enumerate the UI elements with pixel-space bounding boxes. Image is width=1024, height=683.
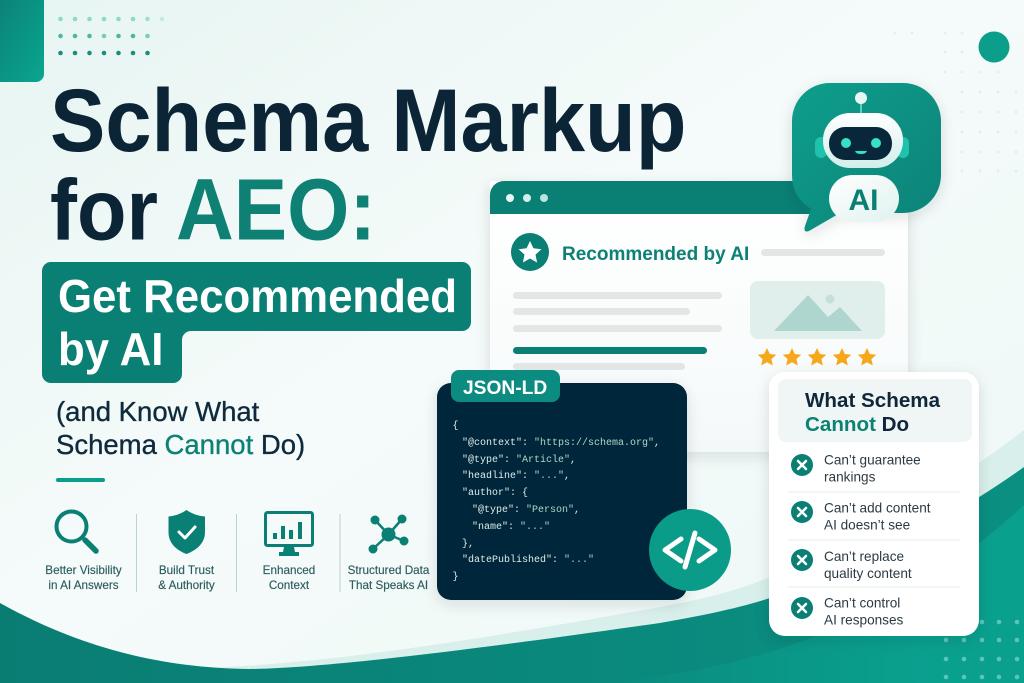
subtitle badge: by AI: [58, 323, 163, 375]
code: "author": {: [462, 487, 528, 499]
icon: shield: [168, 510, 205, 554]
accent underline: [56, 478, 105, 482]
corner square: [0, 0, 44, 82]
title: AEO:: [176, 160, 376, 258]
panel: what schema cannot do: [769, 372, 979, 636]
code: "...": [558, 554, 594, 566]
code: "...",: [534, 471, 570, 482]
code: "@type":: [472, 504, 520, 516]
list item: rankings: Can’t guarantee: [824, 452, 921, 468]
icon: magnifier: [56, 512, 96, 551]
teal circle top right: [978, 32, 1010, 62]
code: "headline":: [462, 470, 528, 482]
icon: AI robot bubble: [792, 83, 941, 231]
dots bottom right: [944, 620, 1019, 679]
code: "Article",: [516, 455, 576, 466]
panel: browser window: [490, 181, 908, 452]
list item: content: Can’t add content: [824, 500, 931, 516]
robot body: AI: [848, 184, 878, 217]
secondary heading: (and Know What: [56, 396, 260, 427]
window dots: [506, 194, 548, 202]
list item: quality: Can’t replace: [824, 549, 904, 564]
label: structured data: That Speaks AI: [349, 579, 428, 592]
image placeholder: [750, 281, 885, 339]
list item: quality: [791, 549, 912, 581]
code: "name":: [472, 521, 514, 533]
browser header: [490, 181, 820, 214]
label: better visibility: Better Visibility: [45, 564, 122, 577]
list item: responses: AI responses: [824, 612, 904, 628]
secondary heading: Schema Cannot Do): [56, 429, 305, 460]
list item: content: AI doesn’t see: [824, 518, 910, 532]
label: better visibility: in AI Answers: [48, 579, 119, 592]
subtitle badge: Get Recommended: [58, 270, 457, 322]
code: "@context":: [462, 437, 528, 449]
subtitle badge: [42, 262, 471, 383]
code: "datePublished":: [462, 554, 558, 566]
star rating: [758, 348, 876, 366]
dot grid top left: [58, 17, 164, 55]
label: structured data: Structured Data: [348, 564, 430, 577]
card header: What Schema: [805, 389, 941, 412]
list item: quality: quality content: [824, 566, 912, 581]
content lines: [513, 249, 885, 370]
label: build trust: Build Trust: [159, 564, 215, 577]
icon: star badge: [511, 233, 549, 271]
JSON-LD tab: [451, 370, 560, 402]
label: build trust: & Authority: [158, 579, 215, 592]
code: "https://schema.org",: [534, 438, 660, 449]
icon: network: [368, 514, 408, 554]
panel: JSON-LD code card: [437, 370, 687, 600]
code: {: [452, 420, 459, 432]
icon: monitor chart: [266, 512, 312, 556]
label: enhanced context: Context: [269, 579, 310, 592]
code: }: [452, 571, 459, 583]
robot ears: [815, 137, 909, 158]
robot face: [829, 127, 892, 160]
code: "Person",: [526, 505, 580, 516]
speech bubble: [792, 83, 941, 231]
icon: code brackets: [649, 509, 731, 591]
JSON-LD tab: JSON-LD: [463, 378, 547, 399]
card header: Cannot Do: [805, 413, 909, 436]
list item: rankings: [791, 452, 921, 484]
code: },: [462, 538, 474, 550]
recommended label: Recommended by AI: [562, 244, 749, 265]
list item: content: [791, 500, 931, 532]
robot body: [829, 175, 899, 222]
title: [50, 71, 686, 258]
faint dots top right: [894, 32, 1018, 172]
list item: rankings: rankings: [824, 470, 876, 484]
card header: [778, 379, 972, 442]
robot head: [823, 113, 903, 168]
list item: responses: Can’t control: [824, 596, 900, 610]
benefits row: [45, 510, 430, 592]
code: "@type":: [462, 454, 510, 466]
bottom wave: [0, 430, 1024, 683]
code: "...": [514, 521, 550, 533]
title: for: [50, 161, 158, 258]
list item: responses: [791, 596, 904, 628]
title: Schema Markup: [50, 71, 686, 171]
robot antenna: [855, 92, 867, 115]
label: enhanced context: Enhanced: [263, 564, 315, 577]
secondary heading: [56, 396, 305, 460]
